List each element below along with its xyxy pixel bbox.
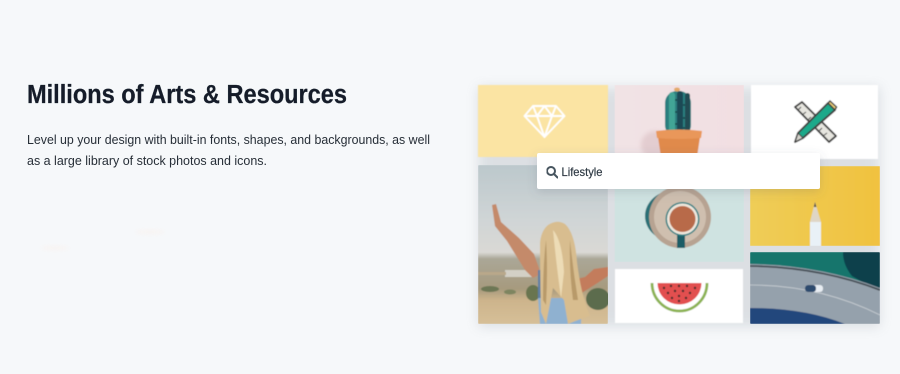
icon: ruler — [795, 102, 836, 142]
car — [814, 284, 824, 292]
description text: Level up your design with built-in fonts, shapes, and backgrounds, as well — [27, 133, 430, 147]
arms — [492, 204, 541, 278]
icon: diamond — [524, 106, 564, 137]
cup — [677, 234, 685, 248]
tile: coffee cup photo — [614, 189, 744, 262]
tile: cactus photo — [614, 85, 744, 159]
collage shadow — [478, 87, 880, 327]
pencil — [810, 222, 821, 246]
icon: watermelon — [652, 283, 707, 311]
dress — [538, 298, 582, 324]
search text: Lifestyle — [562, 165, 603, 179]
tile: diamond icon — [478, 85, 608, 157]
description text — [27, 133, 430, 168]
icon: magnifier — [547, 167, 558, 178]
tile: woman photo — [478, 165, 610, 324]
faint smudges — [41, 231, 165, 249]
image collage — [478, 85, 880, 327]
search bar — [537, 153, 820, 189]
distant landscape — [505, 270, 535, 277]
tile: watermelon icon — [615, 269, 743, 323]
blonde hair — [540, 222, 590, 324]
saucer — [649, 186, 711, 248]
tile: road aerial photo — [750, 252, 880, 324]
terracotta pot — [658, 137, 700, 153]
title: Millions of Arts & Resources — [27, 81, 347, 109]
description text: as a large library of stock photos and icons. — [27, 154, 267, 168]
tile: ruler and pencil icon — [751, 85, 878, 159]
cactus — [665, 88, 691, 137]
icon: pencil — [795, 103, 835, 142]
tile: yellow pencil photo — [750, 166, 880, 246]
saucer shadow — [644, 194, 660, 236]
